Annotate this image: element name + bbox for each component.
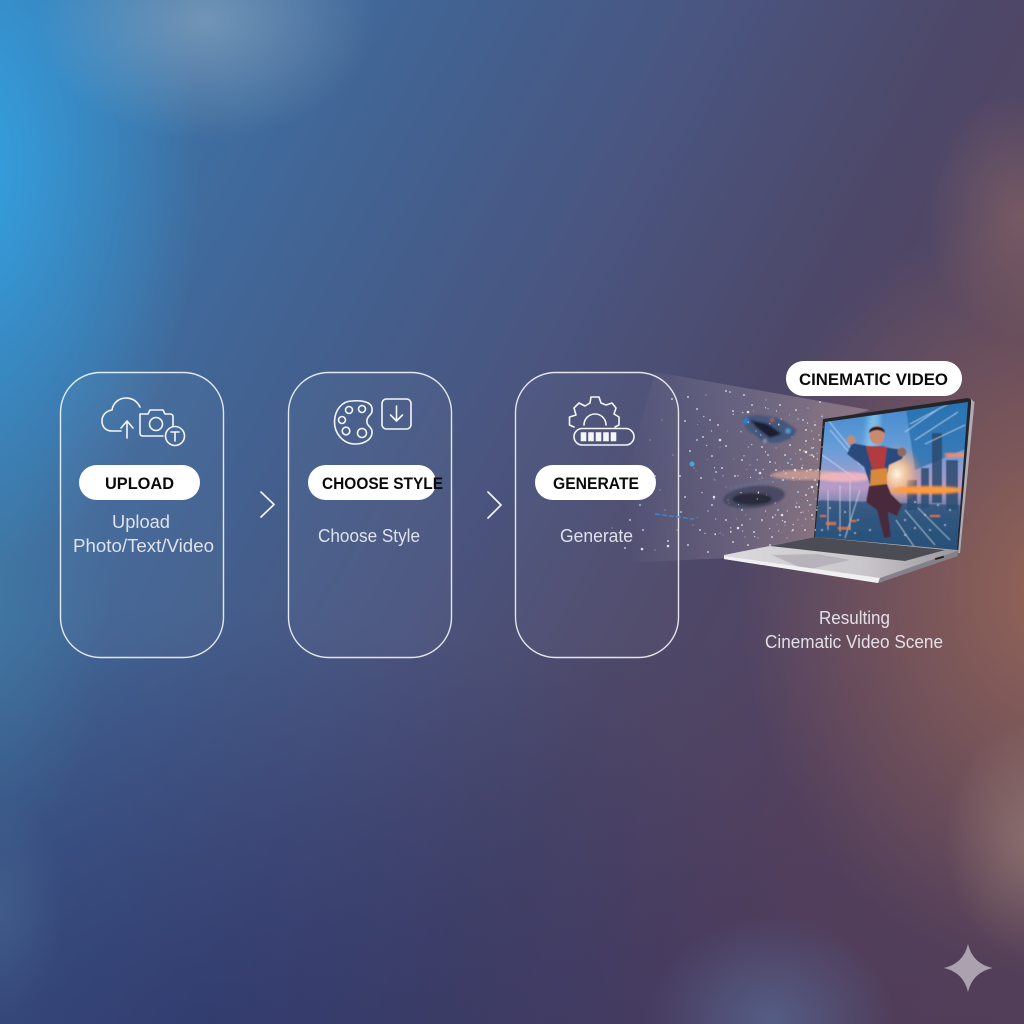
floating debris: rock upper [742,415,797,443]
caption: resulting cinematic video scene: Resulting [819,607,890,628]
label pill: upload: UPLOAD [105,474,174,493]
caption: resulting cinematic video scene [765,607,943,652]
infographic canvas [60,361,992,992]
streak of light into screen [771,470,839,480]
icon: four-point sparkle [944,944,992,992]
caption: choose style: Choose Style [318,525,420,546]
laptop with cinematic scene [724,395,975,583]
light beam from laptop [600,372,870,564]
card 3: generate [516,372,678,658]
icon: cloud upload, camera and text badge [102,398,184,446]
caption: generate: Generate [560,525,633,546]
label pill: cinematic video: CINEMATIC VIDEO [799,370,948,389]
label pill: upload [79,465,200,500]
floating debris: rock lower [722,480,789,511]
caption: upload photo, text, video: Photo/Text/Video [73,535,214,556]
label pill: generate: GENERATE [553,474,639,493]
particle field [610,391,824,552]
laptop lid [814,398,974,552]
label pill: choose style: CHOOSE STYLE [322,474,443,493]
laptop base [724,537,958,583]
label pill: cinematic video [786,361,962,396]
card 1: upload [60,372,224,658]
arrow: step 2 to step 3 [488,492,501,518]
caption: upload photo, text, video [73,511,214,556]
hero figure [846,426,906,538]
screen: hero in city [815,402,968,550]
caption: upload photo, text, video: Upload [112,511,170,532]
card 2: choose style [288,372,452,658]
floating debris: blue streak [655,462,694,519]
label pill: generate [535,465,656,500]
arrow: step 1 to step 2 [261,492,274,517]
caption: resulting cinematic video scene: Cinematic Video Scene [765,631,943,652]
icon: gear with progress bar [570,397,634,445]
label pill: choose style [308,465,443,500]
icon: palette and download box [334,399,411,444]
